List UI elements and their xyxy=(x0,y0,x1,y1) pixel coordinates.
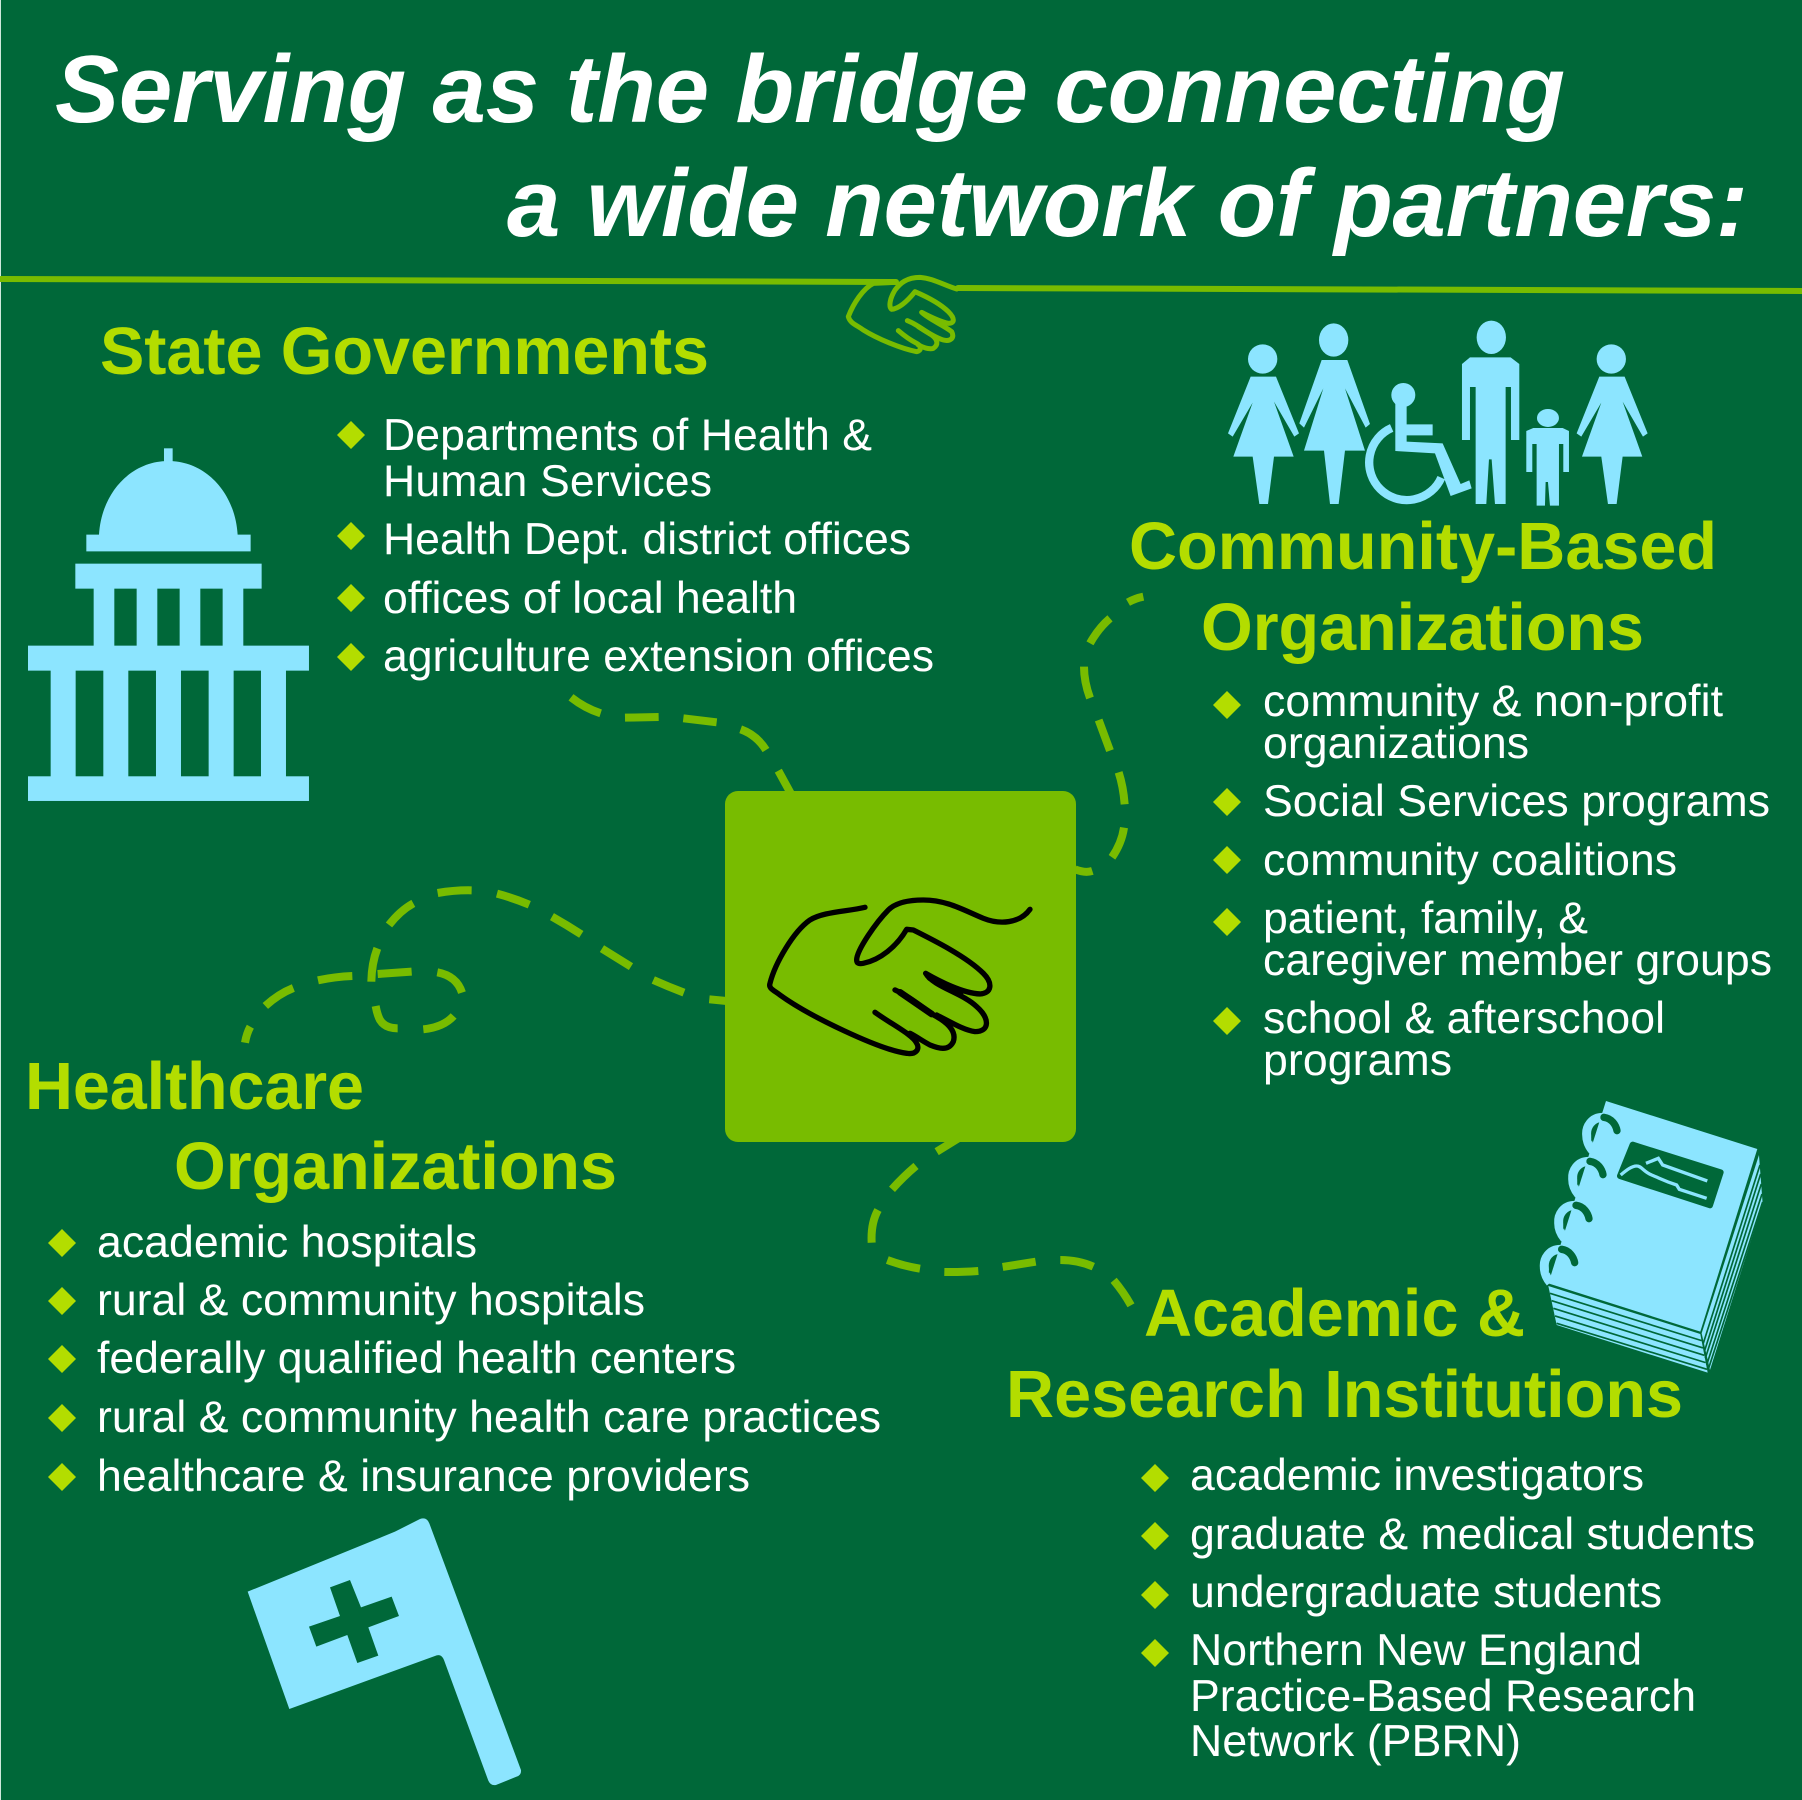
panel: state governments xyxy=(28,315,934,801)
list: community-based organizations: Social Services programs xyxy=(1263,777,1770,826)
list: academic and research institutions: academic investigators xyxy=(1190,1451,1644,1500)
list: state governments xyxy=(337,411,934,681)
list: state governments: offices of local health xyxy=(383,574,797,623)
list: community-based organizations: community coalitions xyxy=(1263,836,1677,885)
central handshake panel xyxy=(725,791,1076,1142)
icon: black handshake xyxy=(770,900,1030,1054)
list: academic and research institutions xyxy=(1141,1451,1755,1766)
list: community-based organizations: school & afterschool xyxy=(1263,994,1665,1043)
dashed connector: community organizations xyxy=(1075,597,1143,872)
list: community-based organizations: caregiver member groups xyxy=(1263,936,1772,985)
heading: healthcare organizations xyxy=(25,1050,617,1204)
list: community-based organizations: patient, family, & xyxy=(1263,894,1588,943)
title: Serving as the bridge connecting xyxy=(55,36,1565,143)
title: a wide network of partners: xyxy=(507,150,1748,257)
list: healthcare organizations: healthcare & insurance providers xyxy=(97,1452,750,1501)
list: community-based organizations xyxy=(1213,677,1772,1085)
dashed connector: academic institutions xyxy=(872,1138,1131,1305)
heading: academic and research institutions xyxy=(1006,1277,1683,1432)
list: community-based organizations: programs xyxy=(1263,1036,1452,1085)
list: healthcare organizations: rural & community hospitals xyxy=(97,1276,645,1325)
heading: community-based organizations: Organizations xyxy=(1201,591,1644,665)
heading: academic and research institutions: Academic & xyxy=(1144,1277,1525,1351)
dashed connector: healthcare organizations xyxy=(245,890,727,1043)
icon: spiral notebook xyxy=(1544,1101,1763,1373)
header divider with handshake icon xyxy=(1,277,1802,352)
heading: healthcare organizations: Healthcare xyxy=(25,1050,364,1124)
list: community-based organizations: organizations xyxy=(1263,719,1529,768)
list: healthcare organizations: rural & community health care practices xyxy=(97,1393,881,1442)
list: academic and research institutions: Network (PBRN) xyxy=(1190,1717,1521,1766)
list: state governments: Human Services xyxy=(383,457,712,506)
icon: people group xyxy=(1228,321,1648,506)
list: academic and research institutions: Practice-Based Research xyxy=(1190,1672,1696,1721)
list: state governments: Departments of Health & xyxy=(383,411,872,460)
heading: community-based organizations: Community-Based xyxy=(1129,510,1717,584)
list: healthcare organizations: federally qualified health centers xyxy=(97,1334,736,1383)
list: healthcare organizations: academic hospitals xyxy=(97,1218,477,1267)
heading: academic and research institutions: Research Institutions xyxy=(1006,1358,1683,1432)
dashed connector: state governments xyxy=(571,697,792,795)
heading: healthcare organizations: Organizations xyxy=(174,1130,617,1204)
panel: community-based organizations xyxy=(1129,321,1772,1085)
list: state governments: Health Dept. district offices xyxy=(383,515,911,564)
icon: medical flag xyxy=(248,1518,521,1785)
list: state governments: agriculture extension offices xyxy=(383,632,934,681)
list: academic and research institutions: Northern New England xyxy=(1190,1626,1642,1675)
title xyxy=(55,36,1748,257)
panel: healthcare organizations xyxy=(25,1050,881,1785)
heading: state governments: State Governments xyxy=(100,315,709,389)
list: academic and research institutions: undergraduate students xyxy=(1190,1568,1662,1617)
panel: academic and research institutions xyxy=(1006,1101,1763,1766)
list: community-based organizations: community & non-profit xyxy=(1263,677,1724,726)
icon: capitol building xyxy=(28,448,309,801)
list: healthcare organizations xyxy=(48,1218,881,1501)
heading: community-based organizations xyxy=(1129,510,1717,665)
list: academic and research institutions: graduate & medical students xyxy=(1190,1510,1755,1559)
